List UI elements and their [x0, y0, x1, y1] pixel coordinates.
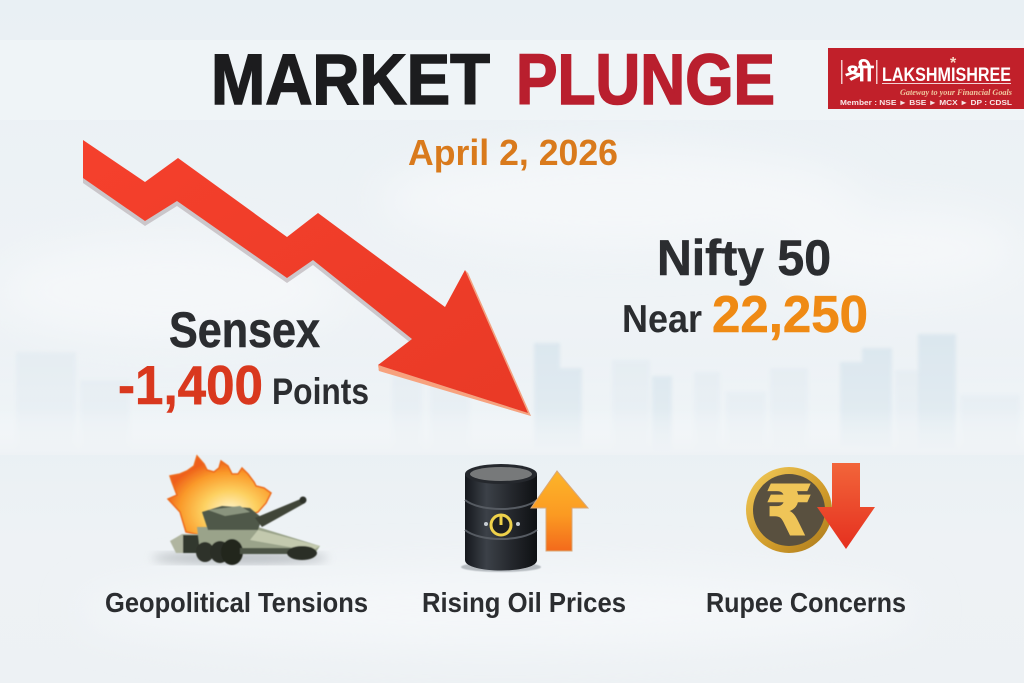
sensex stat	[118, 302, 369, 416]
nifty stat: 22,250	[712, 286, 868, 344]
nifty stat: Nifty 50	[657, 230, 831, 286]
sensex stat: -1,400	[118, 354, 263, 416]
title: PLUNGE	[516, 41, 775, 120]
hazy city skyline	[0, 334, 1024, 455]
logo: Lakshmishree: श्री	[845, 53, 874, 88]
falling red arrow	[83, 140, 531, 416]
sensex stat: Points	[272, 371, 369, 412]
label: rupee concerns: Rupee Concerns	[706, 587, 906, 618]
label: geopolitical tensions: Geopolitical Tensions	[105, 587, 368, 618]
date: April 2, 2026	[408, 132, 618, 173]
icon: oil barrel with up arrow	[461, 464, 588, 572]
title band	[0, 40, 1024, 120]
title	[211, 41, 775, 120]
icon: rupee coin with down arrow	[746, 463, 875, 553]
sensex stat: Sensex	[169, 302, 320, 358]
logo: Lakshmishree	[828, 48, 1024, 109]
logo: Lakshmishree: *	[950, 55, 957, 72]
logo: Lakshmishree: Gateway to your Financial Goals	[900, 88, 1012, 97]
nifty stat: Near	[622, 298, 702, 341]
label: rising oil prices: Rising Oil Prices	[422, 587, 626, 618]
logo: Lakshmishree: Member : NSE ► BSE ► MCX ► DP : CDSL	[840, 98, 1012, 107]
title: MARKET	[211, 41, 490, 120]
icon: rupee coin with down arrow: ₹	[765, 470, 813, 552]
nifty stat	[622, 230, 868, 344]
icon: burning tank	[152, 456, 328, 565]
